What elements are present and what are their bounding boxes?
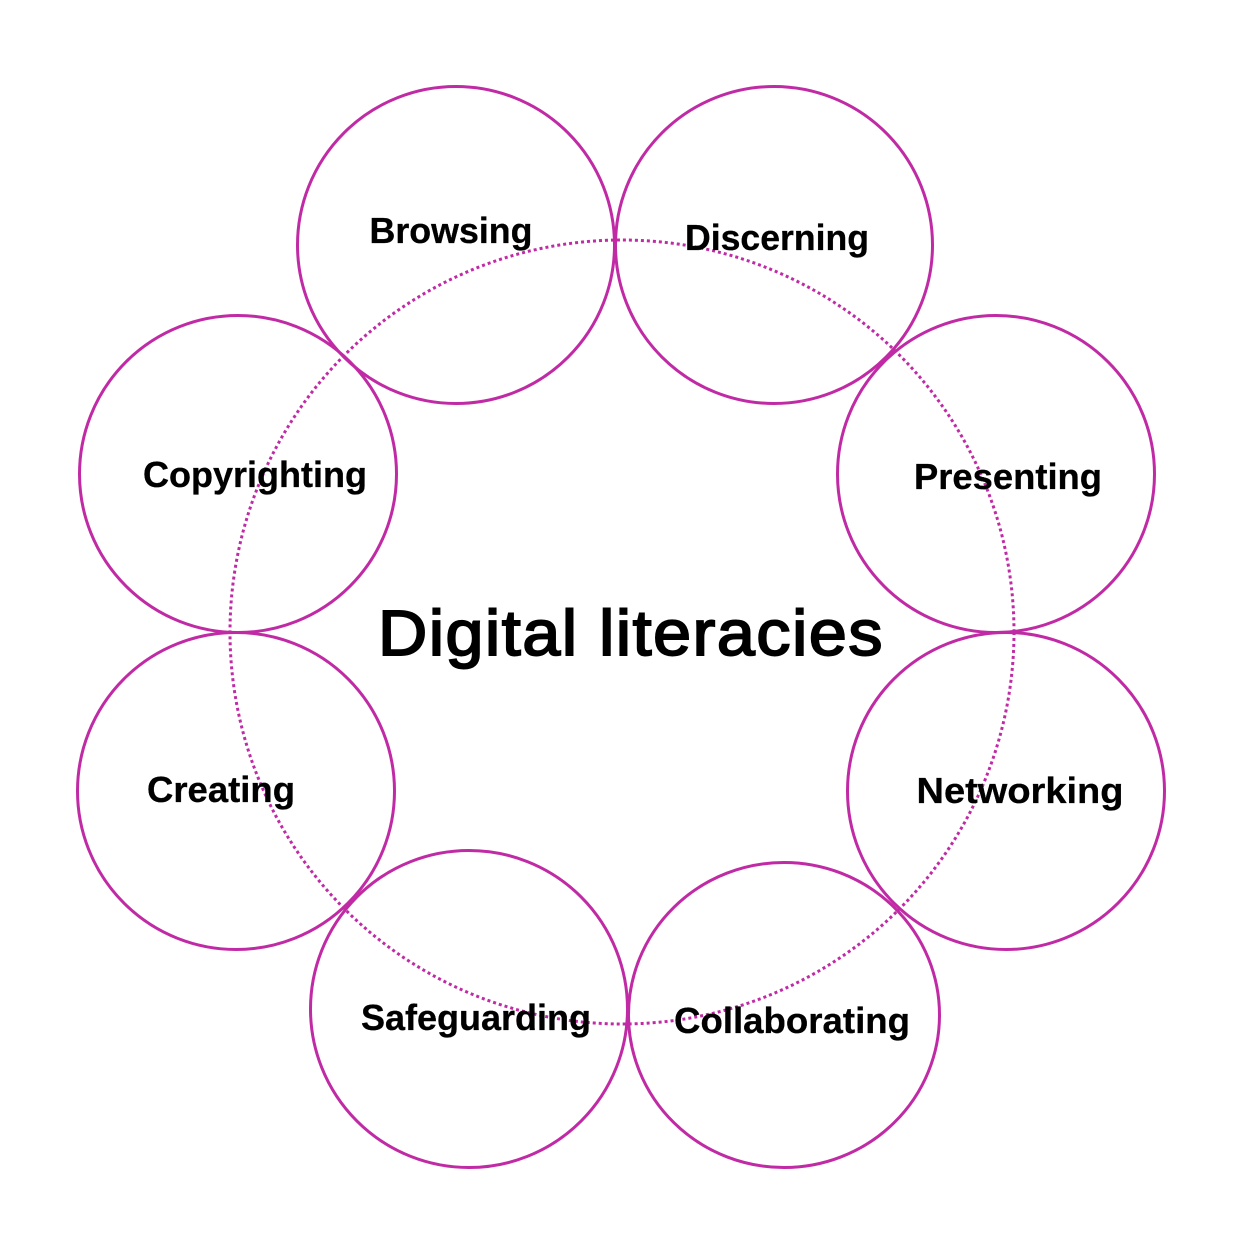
circle: Collaborating: Collaborating xyxy=(674,1000,910,1041)
dotted central circle xyxy=(230,240,1014,1024)
circle: Creating: Creating xyxy=(147,769,295,810)
circle: Copyrighting: Copyrighting xyxy=(143,454,367,495)
circle: Creating xyxy=(78,632,394,950)
title: Digital literacies xyxy=(378,597,884,669)
circle: Networking: Networking xyxy=(916,770,1124,811)
circle: Copyrighting xyxy=(80,316,396,632)
circle: Discerning: Discerning xyxy=(685,217,869,258)
circle: Browsing: Browsing xyxy=(370,210,532,251)
circle: Networking xyxy=(848,632,1164,950)
circle: Discerning xyxy=(616,86,932,404)
circle: Browsing xyxy=(298,86,614,404)
circle: Safeguarding xyxy=(310,850,628,1168)
circle: Safeguarding: Safeguarding xyxy=(361,997,591,1038)
circle: Presenting xyxy=(838,316,1154,632)
circle: Collaborating xyxy=(628,862,940,1168)
circle: Presenting: Presenting xyxy=(914,456,1102,497)
